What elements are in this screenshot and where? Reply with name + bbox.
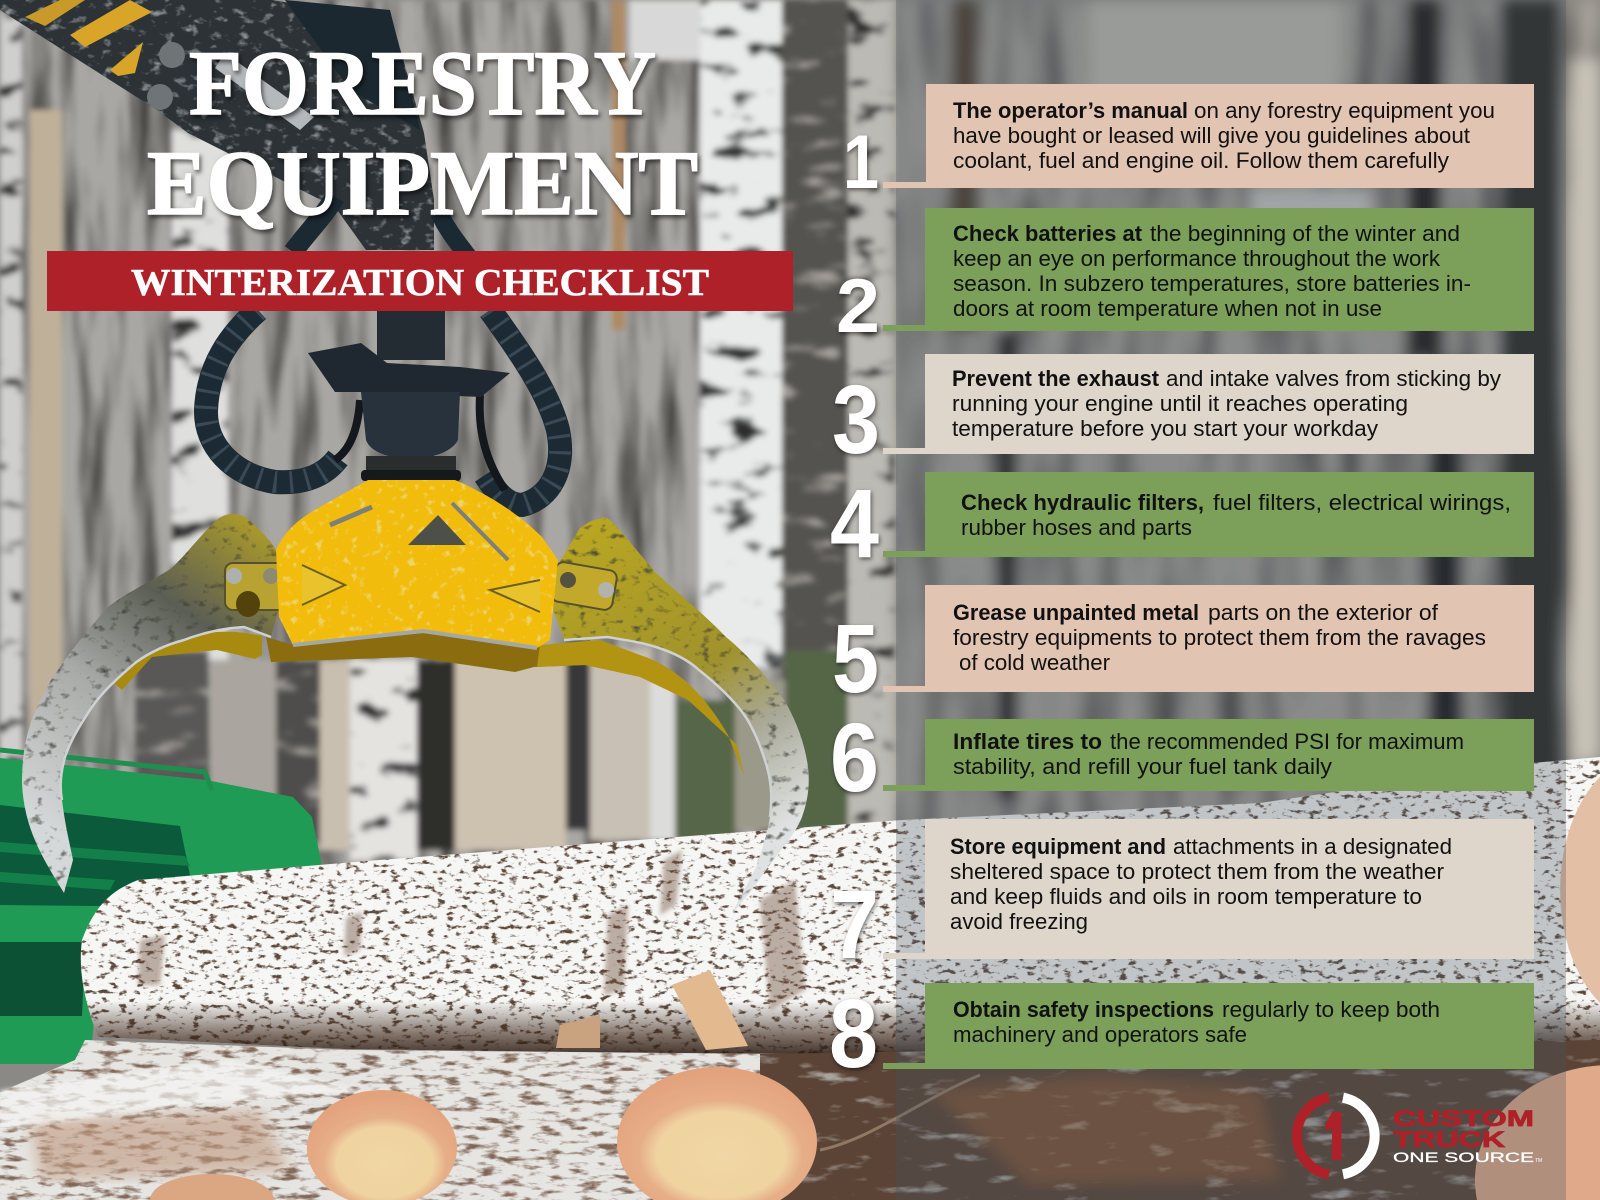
panel: step 6 tires: stability, and refill your fuel tank daily xyxy=(953,754,1332,779)
panel: step 7 storage: and keep fluids and oils in room temperature to xyxy=(950,884,1422,909)
panel: step 5 grease metal: 5 xyxy=(832,604,879,713)
overlay strip behind checklist xyxy=(896,0,1566,1200)
banner: winterization checklist xyxy=(47,251,793,311)
photo: grapple rotator xyxy=(308,300,510,481)
panel: step 7 storage xyxy=(830,819,1534,979)
panel: step 7 storage: avoid freezing xyxy=(950,909,1088,934)
panel: step 1 operator's manual: coolant, fuel and engine oil. Follow them carefully xyxy=(953,148,1449,173)
banner: winterization checklist: WINTERIZATION CHECKLIST xyxy=(131,262,709,304)
panel: step 6 tires: 6 xyxy=(830,703,879,812)
panel: step 2 batteries xyxy=(836,208,1534,349)
photo: hydraulic hoses xyxy=(206,197,560,505)
panel: step 5 grease metal: forestry equipments to protect them from the ravages xyxy=(953,625,1486,650)
panel: step 7 storage: attachments in a designated xyxy=(1173,834,1452,859)
panel: step 8 safety inspections xyxy=(829,979,1534,1088)
title: EQUIPMENT xyxy=(147,132,698,234)
background photo: winter forest right xyxy=(896,0,1600,840)
photo: yellow grapple dome xyxy=(276,480,558,648)
panel: step 3 exhaust valves xyxy=(832,354,1534,474)
panel: step 6 tires: Inflate tires to xyxy=(953,729,1102,754)
panel: step 8 safety inspections: regularly to keep both xyxy=(1222,997,1440,1022)
panel: step 1 operator's manual: on any forestry equipment you xyxy=(1194,98,1495,123)
panel: step 4 hydraulic filters xyxy=(830,469,1534,578)
panel: step 4 hydraulic filters: 4 xyxy=(830,469,879,578)
photo: green forwarder machine xyxy=(0,750,322,1064)
panel: step 1 operator's manual: The operator’s manual xyxy=(953,98,1188,123)
panel: step 6 tires xyxy=(830,703,1534,812)
panel: step 7 storage: sheltered space to protect them from the weather xyxy=(950,859,1444,884)
photo: main snowy log xyxy=(81,757,1600,1060)
panel: step 5 grease metal: parts on the exterior of xyxy=(1208,600,1439,625)
logo: Custom Truck One Source: CUSTOM xyxy=(1393,1106,1534,1131)
panel: step 4 hydraulic filters: rubber hoses and parts xyxy=(961,515,1192,540)
panel: step 2 batteries: doors at room temperature when not in use xyxy=(953,296,1382,321)
icon: logo ring with 1 xyxy=(1297,1098,1375,1174)
photo: boom arm of the grapple xyxy=(0,0,434,250)
panel: step 2 batteries: the beginning of the winter and xyxy=(1150,221,1460,246)
panel: step 1 operator's manual: 1 xyxy=(843,120,879,205)
title xyxy=(147,32,698,234)
background photo: winter forest left xyxy=(0,0,900,880)
panel: step 8 safety inspections: machinery and operators safe xyxy=(953,1022,1247,1047)
logo: Custom Truck One Source: ONE SOURCE xyxy=(1393,1149,1534,1165)
logo: Custom Truck One Source xyxy=(1297,1098,1542,1174)
panel: step 5 grease metal: of cold weather xyxy=(959,650,1110,675)
panel: step 1 operator's manual xyxy=(843,84,1534,205)
panel: step 3 exhaust valves: and intake valves from sticking by xyxy=(1166,366,1501,391)
photo: left claw xyxy=(22,514,287,893)
panel: step 2 batteries: keep an eye on performance throughout the work xyxy=(953,246,1441,271)
panel: step 8 safety inspections: Obtain safety inspections xyxy=(953,997,1214,1022)
panel: step 7 storage: Store equipment and xyxy=(950,834,1166,859)
panel: step 3 exhaust valves: 3 xyxy=(832,365,880,474)
panel: step 3 exhaust valves: Prevent the exhaust xyxy=(952,366,1160,391)
logo: Custom Truck One Source: TRUCK xyxy=(1393,1127,1505,1152)
panel: step 1 operator's manual: have bought or leased will give you guidelines about xyxy=(953,123,1470,148)
panel: step 2 batteries: Check batteries at xyxy=(953,221,1143,246)
logo: Custom Truck One Source: TM xyxy=(1535,1158,1542,1164)
photo: lower logs with cut ends xyxy=(0,1040,1600,1200)
panel: step 2 batteries: 2 xyxy=(836,264,880,349)
panel: step 4 hydraulic filters: Check hydraulic filters, xyxy=(961,490,1204,515)
panel: step 8 safety inspections: 8 xyxy=(829,979,878,1088)
title: FORESTRY xyxy=(189,32,656,134)
photo: grapple underside xyxy=(266,633,590,672)
panel: step 6 tires: the recommended PSI for maximum xyxy=(1110,729,1464,754)
panel: step 5 grease metal: Grease unpainted metal xyxy=(953,600,1199,625)
panel: step 3 exhaust valves: running your engine until it reaches operating xyxy=(952,391,1408,416)
panel: step 5 grease metal xyxy=(832,585,1534,713)
panel: step 7 storage: 7 xyxy=(830,870,879,979)
panel: step 4 hydraulic filters: fuel filters, electrical wirings, xyxy=(1213,490,1511,515)
photo: right claw xyxy=(537,518,809,913)
panel: step 2 batteries: season. In subzero temperatures, store batteries in- xyxy=(953,271,1471,296)
panel: step 3 exhaust valves: temperature before you start your workday xyxy=(952,416,1378,441)
